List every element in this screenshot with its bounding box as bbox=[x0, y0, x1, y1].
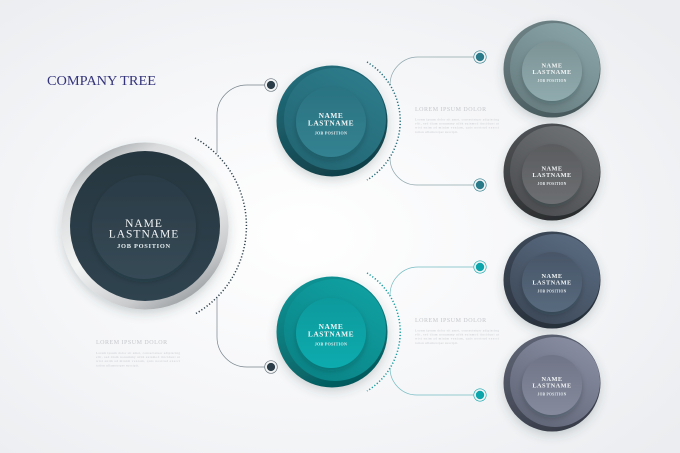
connector lines: upper branch bbox=[390, 57, 480, 185]
lower teal label bbox=[308, 322, 354, 347]
node dot: lower branch bbox=[265, 361, 277, 373]
upper teal label: NAME bbox=[319, 111, 343, 120]
text block: root note: wisi enim ad minim veniam, quis nostrud exerci bbox=[96, 359, 180, 364]
grey violet label bbox=[532, 376, 572, 396]
text block: lower branch note: elit, sed diam nonummy nibh euismod tincidunt ut bbox=[415, 332, 499, 338]
sage label: LASTNAME bbox=[532, 69, 572, 76]
slate blue label: LASTNAME bbox=[532, 280, 572, 286]
text block: root note: Lorem ipsum dolor sit amet, consectetuer adipiscing bbox=[96, 351, 180, 356]
root node: company head bbox=[62, 142, 228, 310]
dotted arc: root bbox=[195, 138, 246, 314]
text block: upper branch note: Lorem ipsum dolor sit amet, consectetuer adipiscing bbox=[415, 118, 499, 122]
text block: upper branch note: tation ullamcorper suscipit. bbox=[415, 130, 458, 134]
connector lines: root to branches bbox=[217, 85, 271, 367]
dotted arc: lower branch bbox=[367, 273, 400, 391]
node dot: upper right 1 bbox=[474, 51, 486, 63]
text block: lower branch note: LOREM IPSUM DOLOR bbox=[415, 318, 487, 324]
text block: upper branch note: wisi enim ad minim veniam, quis nostrud exerci bbox=[415, 126, 499, 130]
text block: root note: tation ullamcorper suscipit. bbox=[96, 364, 139, 368]
text block: lower branch note bbox=[415, 318, 499, 345]
dotted arc: upper branch bbox=[367, 62, 400, 180]
slate blue label bbox=[532, 273, 572, 294]
leaf node: sage bbox=[504, 20, 600, 118]
text block: lower branch note: tation ullamcorper suscipit. bbox=[415, 341, 458, 345]
text block: upper branch note: elit, sed diam nonummy nibh euismod tincidunt ut bbox=[415, 122, 499, 126]
lower teal label: NAME bbox=[319, 322, 343, 331]
upper teal label bbox=[308, 111, 354, 136]
root label bbox=[109, 218, 179, 250]
node dot: upper branch bbox=[265, 79, 277, 91]
upper teal label: LASTNAME bbox=[308, 119, 354, 128]
root label: NAME bbox=[125, 218, 163, 230]
text block: lower branch note: wisi enim ad minim veniam, quis nostrud exerci bbox=[415, 336, 499, 342]
slate blue label: NAME bbox=[541, 273, 563, 280]
leaf node: grey violet bbox=[504, 334, 600, 432]
branch node: lower teal bbox=[276, 276, 388, 388]
text block: root note bbox=[96, 340, 180, 368]
connector lines: lower branch bbox=[390, 267, 480, 395]
sage label bbox=[532, 62, 572, 83]
text block: root note: LOREM IPSUM DOLOR bbox=[96, 340, 168, 346]
node dot: lower right 2 bbox=[474, 389, 486, 401]
text block: lower branch note: Lorem ipsum dolor sit amet, consectetuer adipiscing bbox=[415, 328, 499, 334]
charcoal label: JOB POSITION bbox=[537, 182, 567, 186]
title: COMPANY TREE bbox=[47, 74, 156, 89]
text block: upper branch note: LOREM IPSUM DOLOR bbox=[415, 107, 487, 113]
text block: upper branch note bbox=[415, 107, 499, 134]
grey violet label: LASTNAME bbox=[532, 382, 572, 390]
node dot: upper right 2 bbox=[474, 179, 486, 191]
charcoal label: LASTNAME bbox=[532, 172, 572, 179]
leaf node: slate blue bbox=[504, 232, 600, 328]
charcoal label bbox=[532, 165, 572, 186]
branch node: upper teal bbox=[276, 66, 388, 176]
sage label: JOB POSITION bbox=[537, 79, 567, 83]
root label: JOB POSITION bbox=[117, 243, 171, 250]
root label: LASTNAME bbox=[109, 228, 179, 240]
upper teal label: JOB POSITION bbox=[315, 131, 347, 136]
slate blue label: JOB POSITION bbox=[537, 290, 567, 294]
grey violet label: NAME bbox=[541, 376, 563, 383]
grey violet label: JOB POSITION bbox=[537, 392, 567, 396]
sage label: NAME bbox=[541, 62, 563, 69]
charcoal label: NAME bbox=[541, 165, 563, 172]
leaf node: charcoal bbox=[504, 124, 600, 220]
text block: root note: elit, sed diam nonummy nibh euismod tincidunt ut bbox=[96, 355, 180, 360]
lower teal label: JOB POSITION bbox=[315, 342, 347, 347]
lower teal label: LASTNAME bbox=[308, 330, 354, 339]
node dot: lower right 1 bbox=[474, 261, 486, 273]
